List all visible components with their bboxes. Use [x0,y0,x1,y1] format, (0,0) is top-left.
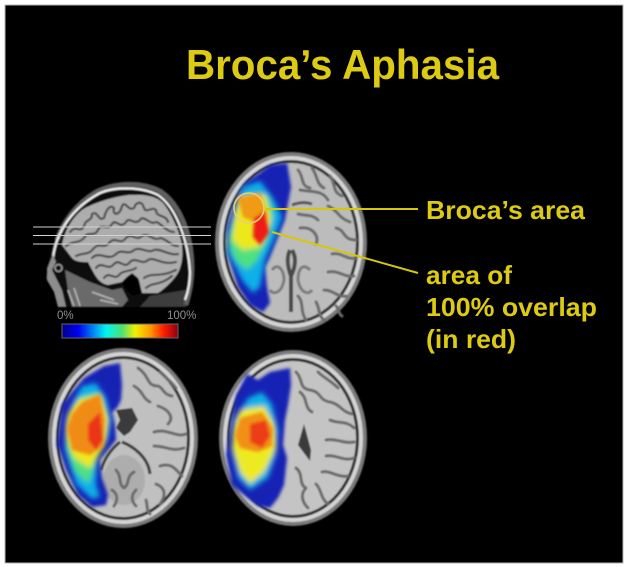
title: Broca’s Aphasia [186,41,500,88]
sagittal brain scan with slice lines [33,183,211,307]
leader line to overlap area [272,232,418,273]
lesion: green zone [228,195,273,270]
colour scale legend [57,310,196,338]
lesion: red zone [250,420,270,448]
lesion: cyan zone [232,392,278,490]
lesion: yellow zone [232,195,271,250]
leader line to Broca's area [266,208,418,210]
lesion: blue zone [226,368,291,508]
axial scan: bottom right, with overlap map [219,350,367,526]
label: area of 100% overlap: (in red) [426,324,516,354]
slice lines [33,227,211,244]
lesion: blue zone [57,363,122,507]
lesion: cyan zone [65,383,111,499]
label: area of 100% overlap: 100% overlap [426,292,597,322]
lesion: blue zone [227,163,291,312]
lesion: cyan zone [228,181,282,293]
axial scan: bottom left, with overlap map [48,348,198,528]
Broca's area circle marker [234,193,264,223]
lesion: yellow zone [66,395,108,468]
axial scan: top, with overlap map [215,152,367,332]
label: area of 100% overlap [426,260,597,354]
colour scale legend: 100% [167,310,196,322]
colour scale legend: 0% [57,310,74,322]
label: Broca's area: Broca’s area [426,195,586,225]
lesion: yellow zone [232,406,276,484]
lesion: orange zone [235,412,273,452]
lesion: red zone [88,412,103,450]
lesion: orange zone [67,394,105,455]
lesion: green zone [66,393,108,484]
label: area of 100% overlap: area of [426,260,512,290]
lesion: orange zone [238,193,268,232]
lesion: red zone [253,211,269,245]
